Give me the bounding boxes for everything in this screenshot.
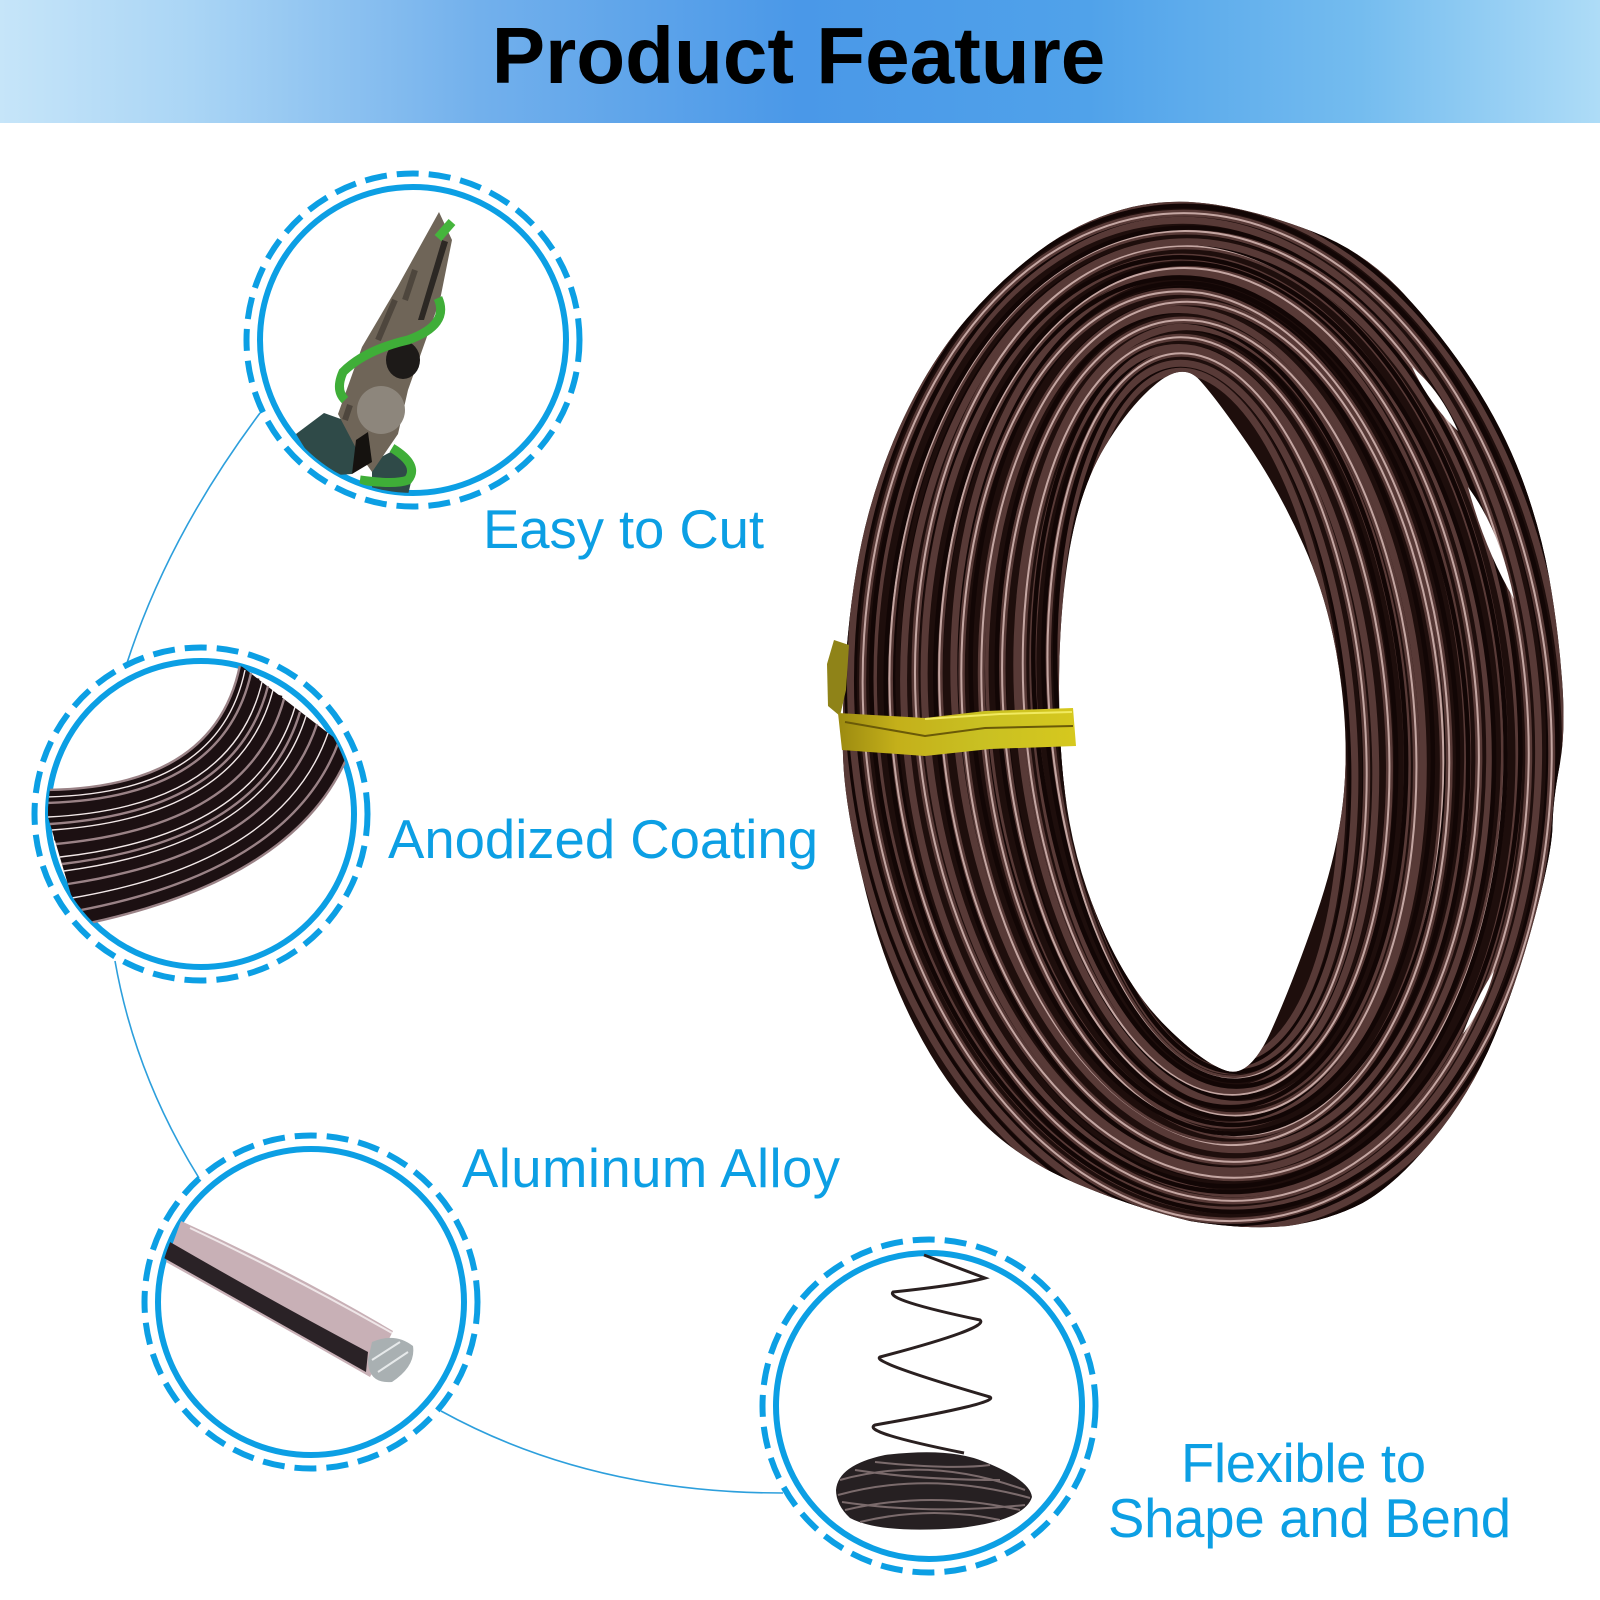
white gaps between loose loops xyxy=(1412,367,1514,1034)
callout: aluminum alloy xyxy=(144,1136,841,1468)
callout: anodized coating xyxy=(34,648,818,980)
label: Easy to Cut xyxy=(483,499,764,560)
connector: cut to coating xyxy=(127,413,260,663)
icon: wire spiral rising from coil xyxy=(836,1255,1032,1530)
gold twist tie xyxy=(827,640,1076,756)
icon: close-up of wire strands xyxy=(40,665,350,925)
icon: cut wire rod xyxy=(164,1221,413,1382)
title: Product Feature xyxy=(492,11,1105,100)
header banner xyxy=(0,0,1600,123)
icon: pliers with green wire xyxy=(296,212,452,495)
label: Shape and Bend xyxy=(1108,1488,1511,1549)
connector: coating to alloy xyxy=(115,961,199,1178)
product image: wire coil xyxy=(827,202,1564,1228)
callout: flexible xyxy=(762,1240,1511,1572)
connector: alloy to flexible xyxy=(441,1411,783,1493)
callout: easy to cut xyxy=(246,174,764,560)
label xyxy=(1108,1433,1511,1549)
label: Flexible to xyxy=(1181,1433,1426,1494)
label: Aluminum Alloy xyxy=(462,1138,841,1199)
label: Anodized Coating xyxy=(388,809,818,870)
